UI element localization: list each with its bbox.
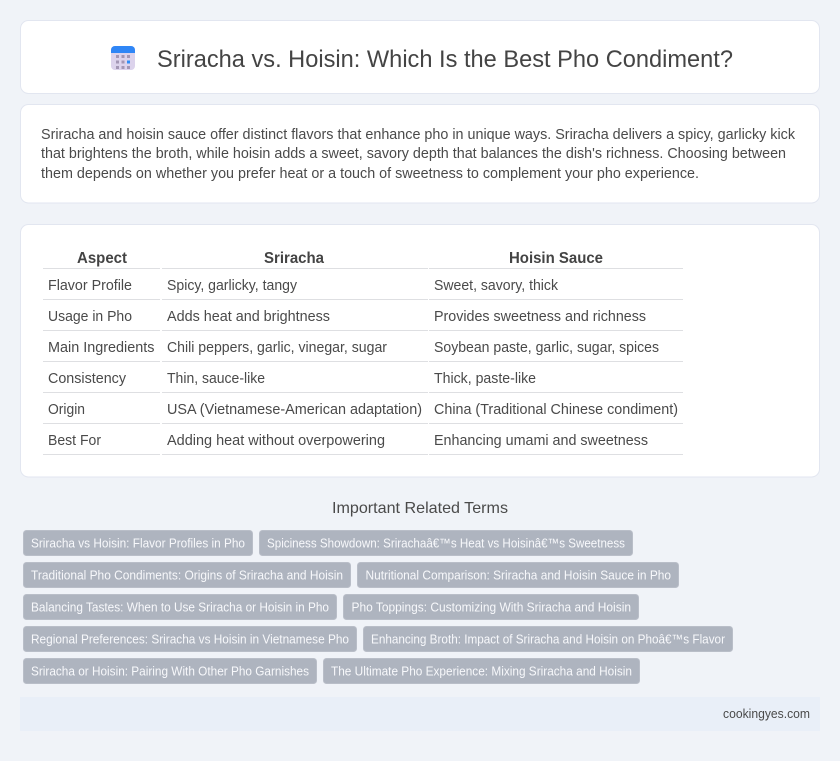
tag: Pho Toppings: Customizing With Sriracha and Hoisin (352, 600, 631, 614)
table header row: Sriracha (264, 250, 324, 267)
table header row: Aspect (77, 250, 128, 267)
table row: usage in pho (43, 309, 683, 330)
tag: Traditional Pho Condiments: Origins of Sriracha and Hoisin (31, 568, 343, 582)
table header row (43, 250, 683, 268)
text block: introduction paragraph: Sriracha and hoisin sauce offer distinct flavors that enhance pho in unique ways. Sriracha delivers a spicy, garlicky kick (41, 127, 796, 143)
table row: consistency: Thin, sauce-like (167, 371, 265, 387)
table header row: Hoisin Sauce (509, 250, 603, 267)
table row: flavor profile: Flavor Profile (48, 278, 132, 294)
panel: related term tags (24, 530, 732, 684)
tag (344, 594, 638, 620)
tag (24, 530, 252, 556)
table row: main ingredients: Soybean paste, garlic, sugar, spices (434, 340, 659, 356)
tag: Enhancing Broth: Impact of Sriracha and Hoisin on Phoâ€™s Flavor (371, 632, 725, 646)
table row: main ingredients (43, 340, 683, 362)
panel: comparison table (20, 224, 820, 477)
panel: title header (20, 20, 820, 94)
table row: origin: USA (Vietnamese-American adaptation) (167, 402, 422, 418)
table row: main ingredients: Chili peppers, garlic, vinegar, sugar (167, 340, 387, 356)
table row: origin: Origin (48, 402, 85, 418)
tag (24, 562, 350, 588)
tag: Spiciness Showdown: Srirachaâ€™s Heat vs Hoisinâ€™s Sweetness (267, 536, 625, 550)
tag (364, 626, 732, 652)
heading: important related terms: Important Related Terms (332, 500, 508, 517)
table row: flavor profile: Spicy, garlicky, tangy (167, 278, 298, 294)
table row: best for: Best For (48, 433, 101, 449)
text block: introduction paragraph: that brightens the broth, while hoisin adds a sweet, savory depth that balances the dish's richness. Choosing between (41, 146, 786, 162)
text block: introduction paragraph (41, 127, 796, 182)
table row: best for: Enhancing umami and sweetness (434, 433, 648, 449)
table row: consistency (43, 371, 683, 392)
tag (24, 658, 316, 684)
tag: Nutritional Comparison: Sriracha and Hoisin Sauce in Pho (366, 568, 671, 582)
tag: Sriracha or Hoisin: Pairing With Other Pho Garnishes (31, 664, 309, 678)
footer (20, 697, 820, 731)
tag (324, 658, 640, 684)
text block: introduction paragraph: them depends on whether you prefer heat or a touch of sweetness to complement your pho experience. (41, 166, 699, 182)
table row: usage in pho: Adds heat and brightness (167, 309, 330, 325)
table row: origin (43, 402, 683, 424)
table row: usage in pho: Usage in Pho (48, 309, 132, 325)
table row: origin: China (Traditional Chinese condiment) (434, 402, 678, 418)
table row: main ingredients: Main Ingredients (48, 340, 154, 356)
table row: flavor profile (43, 278, 683, 300)
footer source label: cookingyes.com (723, 707, 810, 721)
tag (24, 594, 336, 620)
tag: Balancing Tastes: When to Use Sriracha or Hoisin in Pho (31, 600, 329, 614)
tag: The Ultimate Pho Experience: Mixing Sriracha and Hoisin (331, 664, 632, 678)
table row: usage in pho: Provides sweetness and richness (434, 309, 646, 325)
tag: Regional Preferences: Sriracha vs Hoisin in Vietnamese Pho (31, 632, 349, 646)
tag: Sriracha vs Hoisin: Flavor Profiles in Pho (31, 536, 245, 550)
icon: calendar (111, 46, 135, 70)
table row: best for (43, 433, 683, 454)
table row: consistency: Thick, paste-like (434, 371, 536, 387)
panel: introduction (20, 104, 820, 203)
tag (24, 626, 356, 652)
title: Sriracha vs. Hoisin: Which Is the Best Pho Condiment? (157, 46, 733, 73)
table row: best for: Adding heat without overpowering (167, 433, 385, 449)
tag (358, 562, 678, 588)
table row: flavor profile: Sweet, savory, thick (434, 278, 559, 294)
table row: consistency: Consistency (48, 371, 127, 387)
tag (260, 530, 632, 556)
